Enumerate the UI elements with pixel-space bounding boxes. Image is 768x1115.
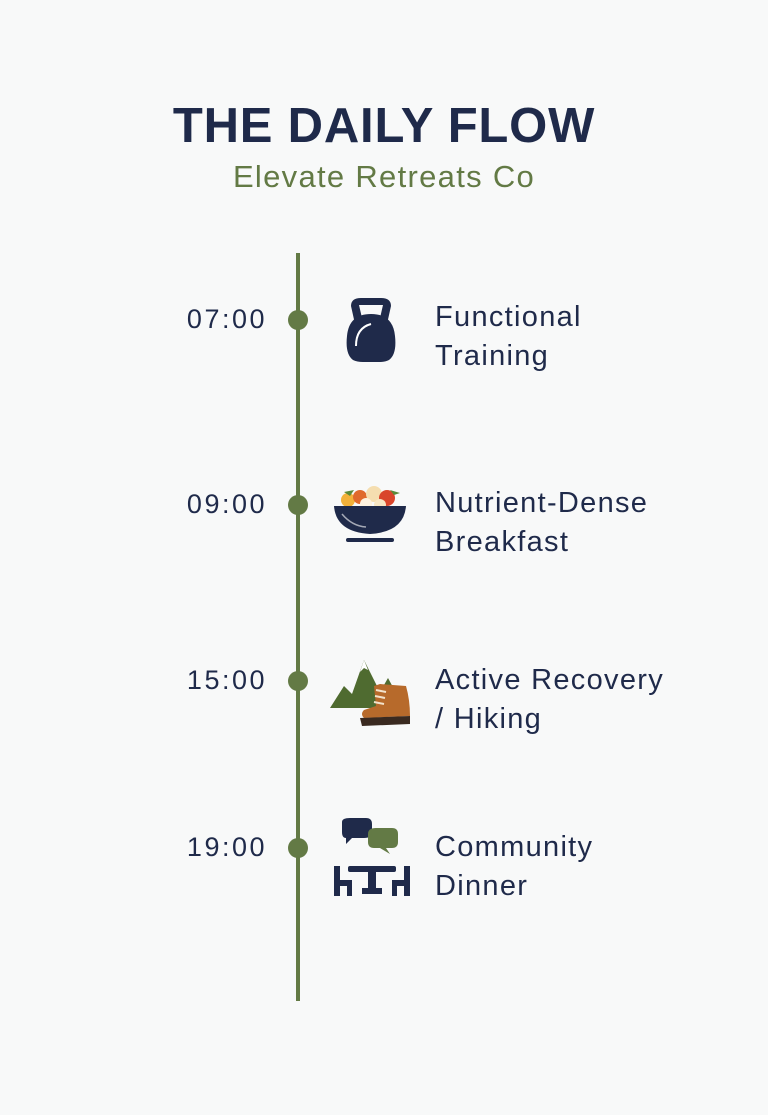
icon: mountains and boot <box>330 660 410 726</box>
label 4 <box>435 831 593 902</box>
label 2: Nutrient-Dense <box>435 487 648 519</box>
label 2: Breakfast <box>435 526 569 558</box>
label 1 <box>435 301 582 372</box>
label 4: Dinner <box>435 870 528 902</box>
dot 3 <box>288 671 308 691</box>
time 09:00: 09:00 <box>187 489 267 519</box>
icon: kettlebell <box>346 298 396 362</box>
dot 1 <box>288 310 308 330</box>
icon: bowl <box>334 486 406 542</box>
time 07:00: 07:00 <box>187 304 267 334</box>
label 1: Functional <box>435 301 582 333</box>
title: THE DAILY FLOW <box>173 99 595 153</box>
label 2 <box>435 487 648 558</box>
time 15:00: 15:00 <box>187 665 267 695</box>
dot 2 <box>288 495 308 515</box>
timeline line <box>296 253 300 1001</box>
label 3 <box>435 664 664 735</box>
label 1: Training <box>435 340 549 372</box>
icon: community dinner <box>334 818 410 896</box>
time 19:00: 19:00 <box>187 832 267 862</box>
label 4: Community <box>435 831 593 863</box>
label 3: / Hiking <box>435 703 542 735</box>
dot 4 <box>288 838 308 858</box>
subtitle: Elevate Retreats Co <box>233 159 535 194</box>
label 3: Active Recovery <box>435 664 664 696</box>
